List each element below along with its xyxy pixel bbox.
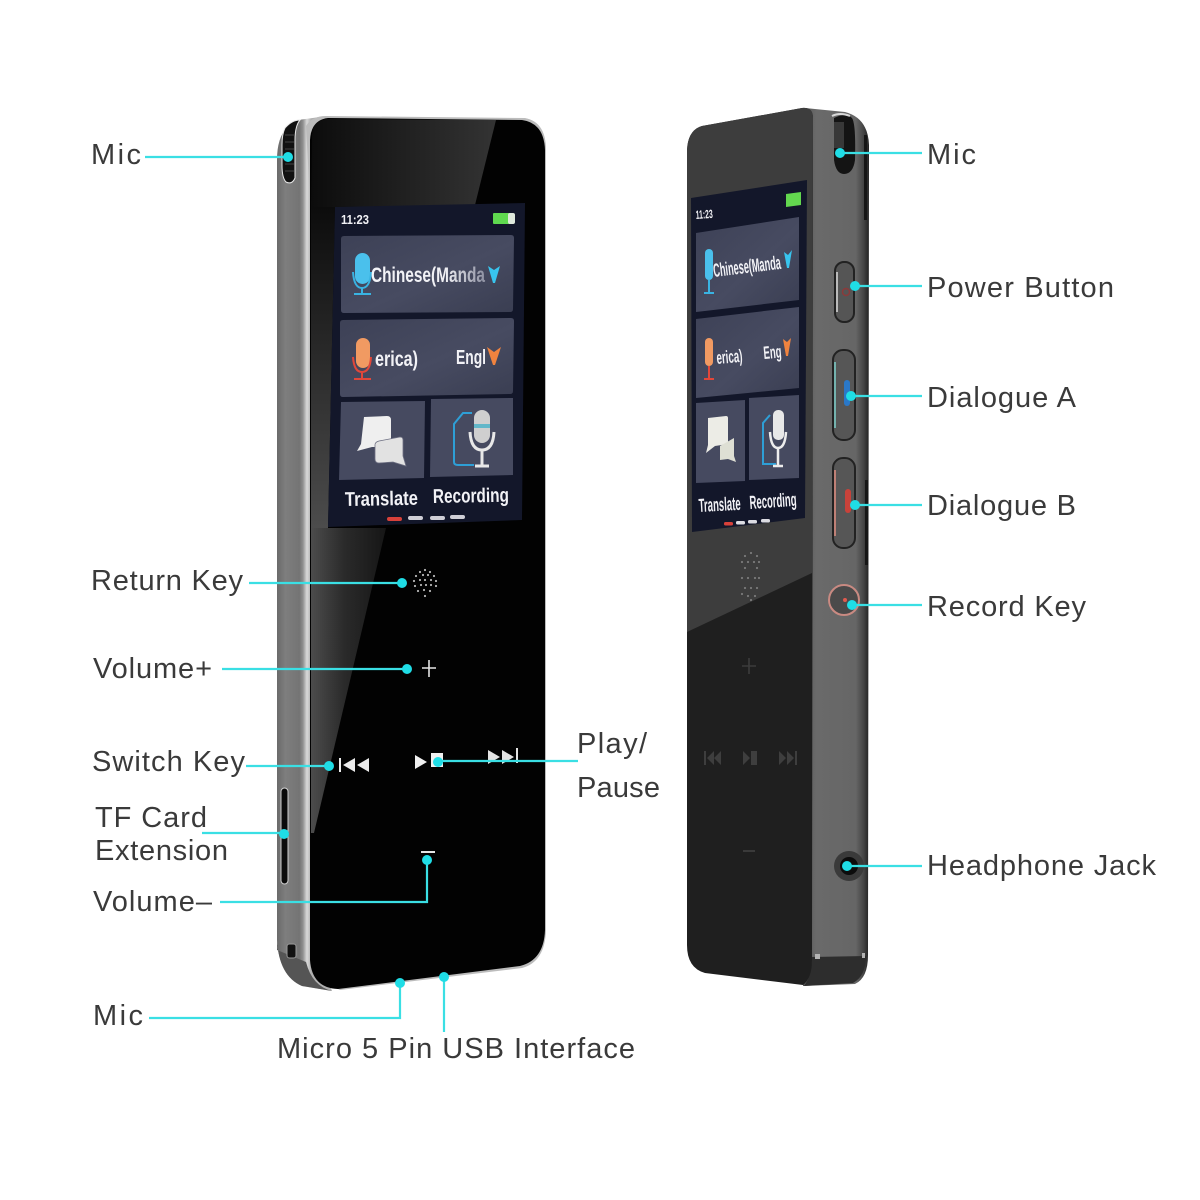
callout: TF card extension: TF Card: [95, 802, 207, 834]
icon: blue arrow: [488, 266, 500, 283]
callout: volume minus: [93, 855, 432, 918]
callout: mic top: Mic: [91, 139, 141, 171]
right device screen: [691, 180, 807, 532]
callout: record key: [847, 591, 1086, 623]
target language text right: Eng: [763, 341, 782, 363]
dialogue A button: [833, 350, 855, 440]
left device: front view: [277, 116, 546, 991]
right device upper grey glass: [687, 108, 813, 632]
recording label: Recording: [433, 485, 509, 508]
target language text right: Engl: [456, 347, 486, 369]
recording label: Recording: [749, 490, 797, 514]
right device chamfer highlights: [815, 953, 865, 959]
icon: faint return key dots: [741, 552, 760, 601]
icon: document and microphone: [454, 410, 494, 466]
left device TF card slot: [281, 788, 288, 884]
callouts: left device: [91, 139, 660, 1065]
icon: orange microphone: [353, 338, 371, 379]
source language text: Chinese(Manda: [371, 264, 485, 287]
status time: 11:23: [341, 212, 369, 227]
panel: source language: Chinese(Manda: [712, 253, 782, 282]
callout: power button: Power Button: [927, 272, 1114, 304]
icon: orange arrow: [783, 338, 791, 356]
icon: next track: [488, 748, 518, 764]
panel: source language: [341, 235, 514, 313]
callout: dialogue B: Dialogue B: [927, 490, 1076, 522]
callout: mic bottom: [93, 978, 405, 1032]
left device mic slot: [282, 120, 300, 183]
left device upper glass reflection: [311, 119, 496, 207]
icon: blue microphone: [353, 253, 371, 294]
status time: 11:23: [695, 207, 713, 222]
left device top and right silver edge: [306, 116, 546, 990]
left device screen: [328, 203, 525, 527]
right device side slits: [864, 135, 868, 565]
left device side frame: [277, 117, 332, 991]
callout: TF card extension: [95, 802, 289, 867]
callout: volume plus: Volume+: [93, 653, 212, 685]
callout: mic: Mic: [927, 139, 976, 171]
callout: switch key: Switch Key: [92, 746, 246, 778]
icon: return key dots: [413, 569, 437, 597]
page indicator: [724, 519, 770, 526]
panel: target language: [340, 318, 514, 397]
callout: play pause: Play/: [577, 728, 648, 760]
right device bottom chamfer: [804, 956, 866, 986]
callout: volume plus: [93, 653, 412, 685]
panel: target language: [696, 307, 799, 398]
icon: orange microphone: [704, 338, 714, 379]
icon: plus: [422, 660, 436, 677]
icon: blue arrow: [784, 250, 792, 268]
icon: speech bubbles: [357, 416, 406, 466]
headphone jack: [834, 851, 864, 881]
icon: faint media keys: [704, 751, 797, 765]
icon: orange arrow: [487, 347, 501, 365]
callout: mic bottom: Mic: [93, 1000, 143, 1032]
right device side body: [803, 108, 869, 986]
right device mic slot: [832, 114, 855, 174]
callout: dialogue A: Dialogue A: [927, 382, 1077, 414]
icon: speech bubbles: [706, 416, 736, 462]
power button: [835, 262, 854, 322]
callouts: right device: [835, 139, 1156, 882]
icon: faint plus: [742, 658, 756, 674]
panel: recording tile: [430, 398, 513, 477]
callout: USB interface: [277, 972, 635, 1065]
panel: source language: [696, 217, 799, 312]
icon: previous track: [339, 758, 369, 772]
icon: play pause: [415, 753, 443, 769]
icon: blue microphone: [704, 249, 714, 293]
dialogue B button: [833, 458, 855, 548]
icon: faint minus: [743, 850, 755, 852]
callout: mic: [835, 139, 976, 171]
callout: dialogue A: [846, 382, 1077, 414]
target language text left: erica): [716, 346, 743, 368]
right device face: [687, 108, 813, 985]
callout: switch key: [92, 746, 334, 778]
battery icon: [786, 192, 801, 207]
callout: USB interface: Micro 5 Pin USB Interface: [277, 1033, 635, 1065]
panel: translate tile: [696, 400, 745, 483]
left device black glass face: [310, 118, 545, 989]
translate label: Translate: [698, 494, 741, 517]
icon: minus: [421, 851, 435, 853]
callout: return key: Return Key: [91, 565, 244, 597]
left device small hole: [287, 944, 296, 958]
record key: [829, 585, 859, 615]
callout: record key: Record Key: [927, 591, 1086, 623]
icon: document and microphone: [763, 410, 786, 466]
panel: translate tile: [339, 401, 425, 480]
callout: play pause: Pause: [577, 772, 660, 804]
left device bottom chamfer: [277, 940, 332, 991]
right device: side view: [687, 108, 869, 986]
left device glass strip beside screen: [311, 207, 335, 528]
callout: headphone jack: Headphone Jack: [927, 850, 1156, 882]
page indicator: [387, 515, 465, 521]
panel: recording tile: [749, 395, 799, 480]
callout: volume minus: Volume–: [93, 886, 213, 918]
callout: return key: [91, 565, 407, 597]
callout: TF card extension: Extension: [95, 835, 228, 867]
callout: mic top: [91, 139, 293, 171]
battery icon: [493, 213, 515, 224]
translate label: Translate: [345, 488, 418, 511]
target language text left: erica): [375, 348, 418, 371]
callout: play pause: [433, 728, 660, 804]
left device lower glass reflection: [311, 528, 386, 833]
callout: dialogue B: [850, 490, 1076, 522]
